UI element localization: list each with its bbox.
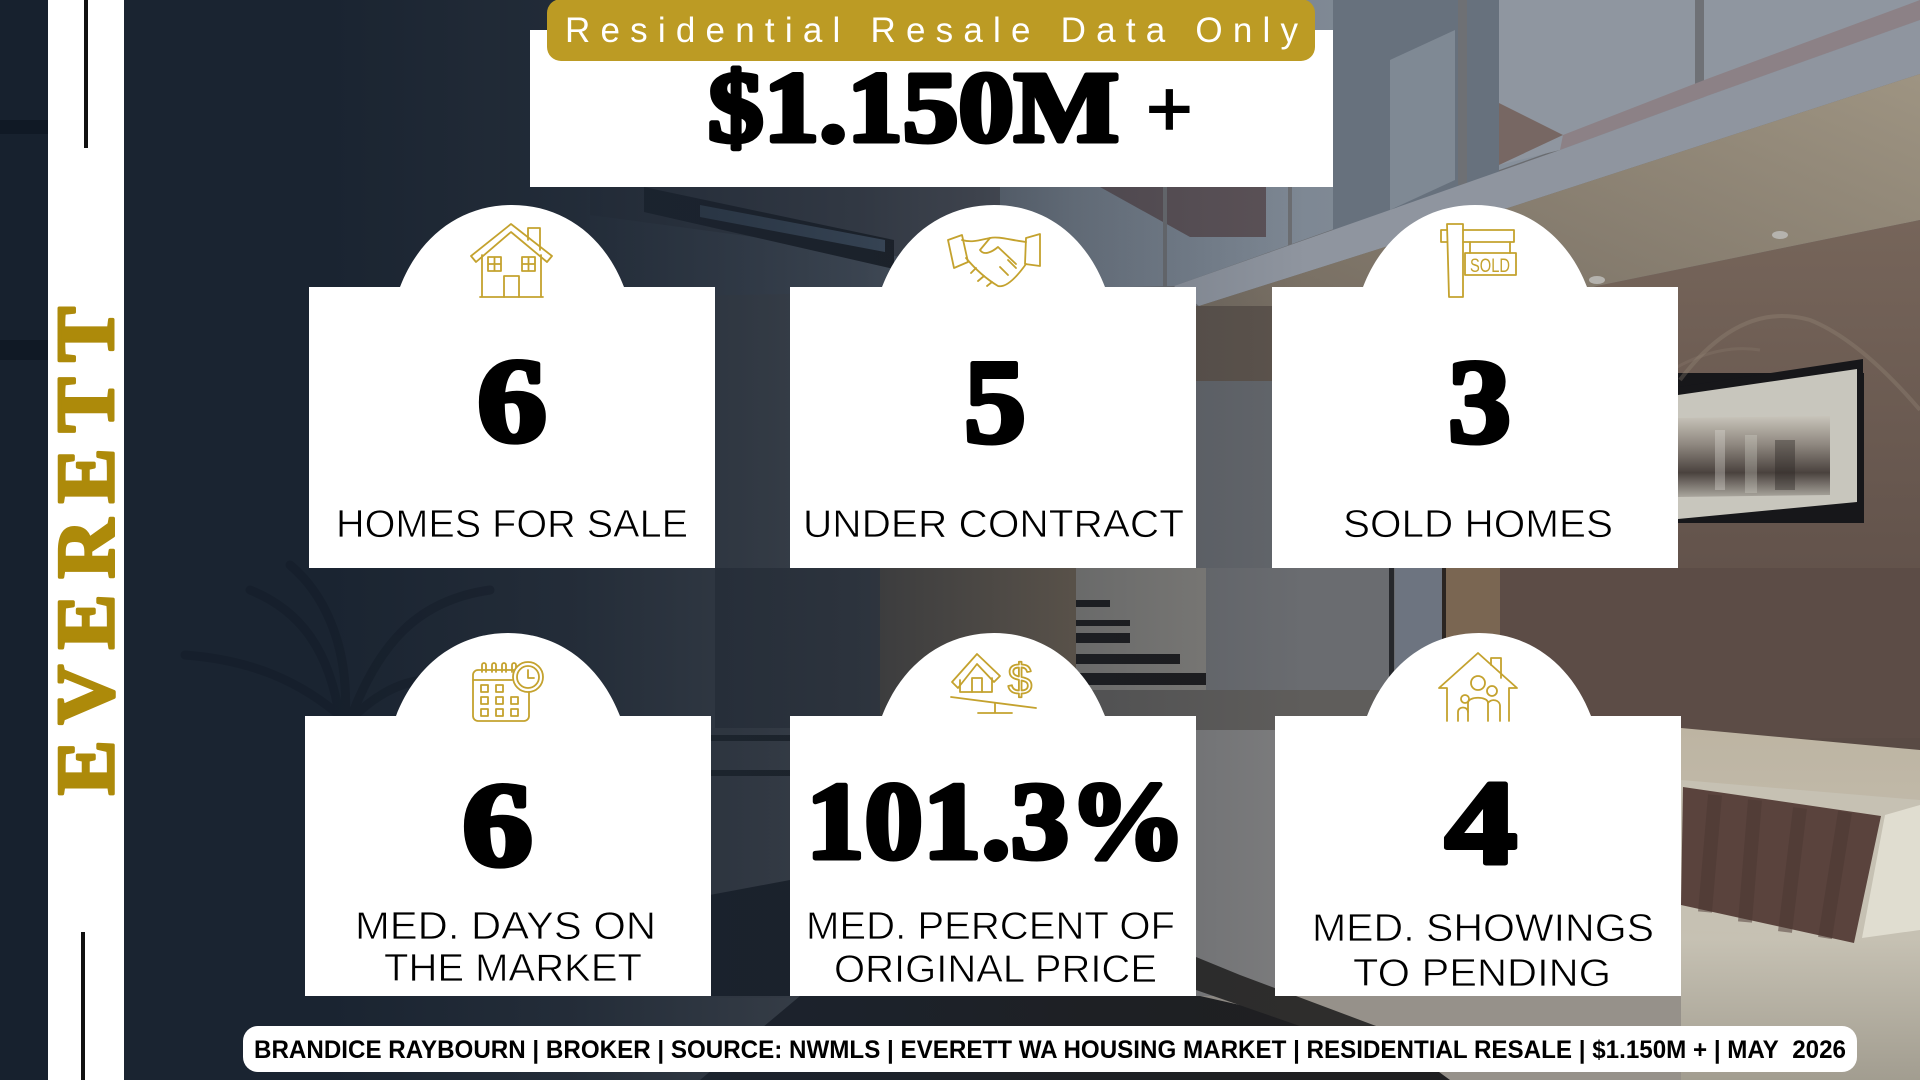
value: 4 bbox=[1445, 756, 1517, 889]
card: under contract bbox=[790, 205, 1196, 568]
label line 1: MED. SHOWINGS bbox=[1312, 907, 1654, 950]
label line 2: TO PENDING bbox=[1353, 952, 1611, 995]
label bbox=[355, 905, 656, 990]
card: median days on market bbox=[305, 633, 711, 996]
value: 3 bbox=[1448, 335, 1511, 468]
label: UNDER CONTRACT bbox=[803, 503, 1184, 546]
label line 1: MED. PERCENT OF bbox=[806, 905, 1175, 948]
label line 2: ORIGINAL PRICE bbox=[834, 948, 1157, 991]
pill text: Residential Resale Data Only bbox=[565, 11, 1298, 50]
band line top bbox=[84, 0, 88, 148]
sold text: SOLD bbox=[1470, 256, 1510, 277]
label: SOLD HOMES bbox=[1343, 503, 1613, 546]
label bbox=[806, 905, 1175, 991]
plant fronds bbox=[185, 565, 490, 720]
icon: sold sign bbox=[1441, 224, 1516, 297]
vertical white band bbox=[40, 0, 131, 1080]
value: 6 bbox=[477, 334, 547, 467]
value: 5 bbox=[964, 335, 1026, 468]
value: 101.3% bbox=[806, 760, 1186, 882]
card: median percent of original price bbox=[790, 633, 1196, 996]
label: HOMES FOR SALE bbox=[336, 503, 688, 546]
footer bar bbox=[243, 1026, 1857, 1072]
pillow bbox=[1681, 787, 1881, 943]
icon: calendar and clock bbox=[473, 662, 543, 721]
price value: $1.150M bbox=[708, 51, 1119, 163]
icon: house and dollar scale bbox=[951, 654, 1036, 713]
icon: house bbox=[471, 224, 552, 297]
plus sign: + bbox=[1146, 64, 1193, 153]
card: homes for sale bbox=[309, 205, 715, 568]
gold pill bbox=[547, 0, 1315, 61]
card: sold homes bbox=[1272, 205, 1678, 568]
band line bottom bbox=[81, 932, 85, 1080]
label line 2: THE MARKET bbox=[384, 947, 642, 990]
city name: EVERETT bbox=[40, 307, 131, 795]
title panel bbox=[530, 0, 1333, 187]
card: median showings to pending bbox=[1275, 633, 1681, 996]
value: 6 bbox=[462, 758, 533, 891]
dollar sign: $ bbox=[1008, 655, 1032, 704]
label line 1: MED. DAYS ON bbox=[355, 905, 656, 948]
icon: family in house bbox=[1439, 653, 1517, 721]
label bbox=[1312, 907, 1654, 995]
icon: handshake bbox=[948, 234, 1040, 286]
footer text: BRANDICE RAYBOURN | BROKER | SOURCE: NWMLS | EVERETT WA HOUSING MARKET | RESIDENTIAL RESALE | $1.150M + | MAY 2026 bbox=[254, 1036, 1846, 1064]
